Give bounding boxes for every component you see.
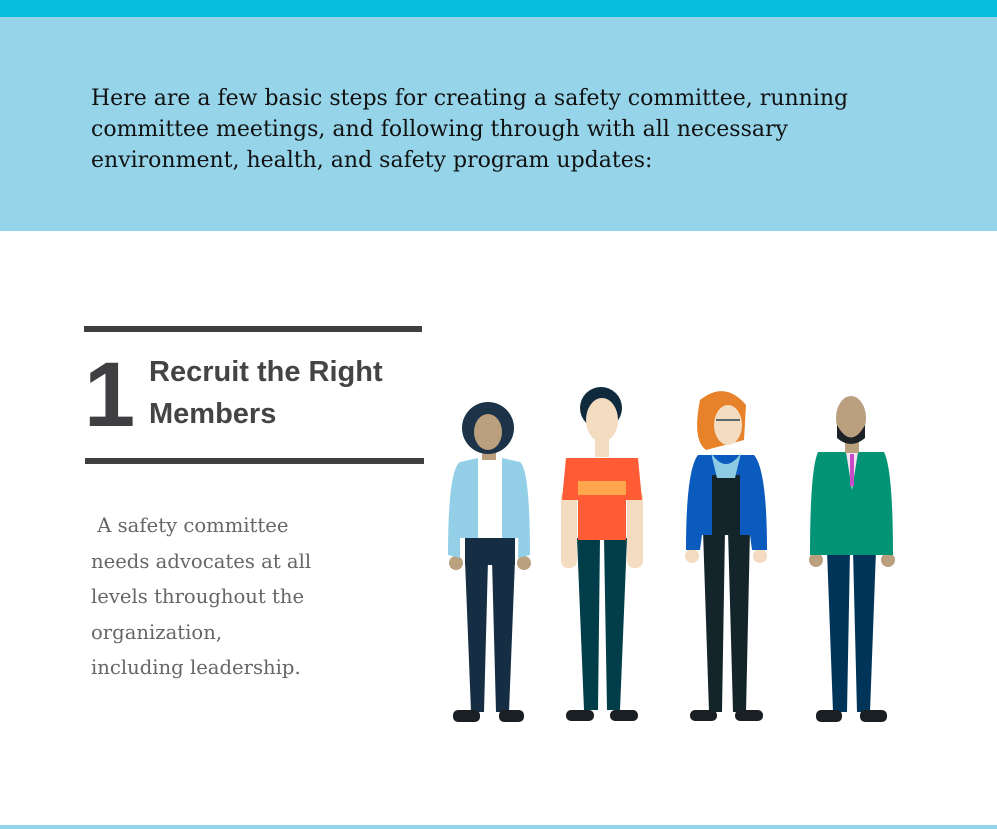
step description bbox=[91, 514, 311, 679]
step description: A safety committee bbox=[97, 514, 288, 537]
person 2 bbox=[561, 387, 643, 721]
person 3 bbox=[685, 391, 767, 721]
step description: organization, bbox=[91, 620, 222, 644]
illustration: four people bbox=[448, 387, 895, 722]
step title bbox=[149, 356, 383, 430]
intro text: environment, health, and safety program updates: bbox=[91, 148, 652, 173]
intro text: committee meetings, and following through with all necessary bbox=[91, 117, 788, 142]
step description: including leadership. bbox=[91, 656, 301, 679]
step title: Recruit the Right bbox=[149, 356, 383, 388]
person 4 bbox=[809, 396, 895, 722]
step heading block bbox=[84, 326, 424, 464]
step title: Members bbox=[149, 398, 276, 430]
step description: needs advocates at all bbox=[91, 550, 311, 572]
step number: 1 bbox=[84, 344, 135, 446]
intro panel bbox=[0, 17, 997, 231]
bottom line bbox=[0, 825, 997, 829]
top bar bbox=[0, 0, 997, 17]
intro text bbox=[91, 86, 848, 173]
intro text: Here are a few basic steps for creating a safety committee, running bbox=[91, 86, 848, 111]
step description: levels throughout the bbox=[91, 585, 304, 608]
person 1 bbox=[448, 402, 531, 722]
